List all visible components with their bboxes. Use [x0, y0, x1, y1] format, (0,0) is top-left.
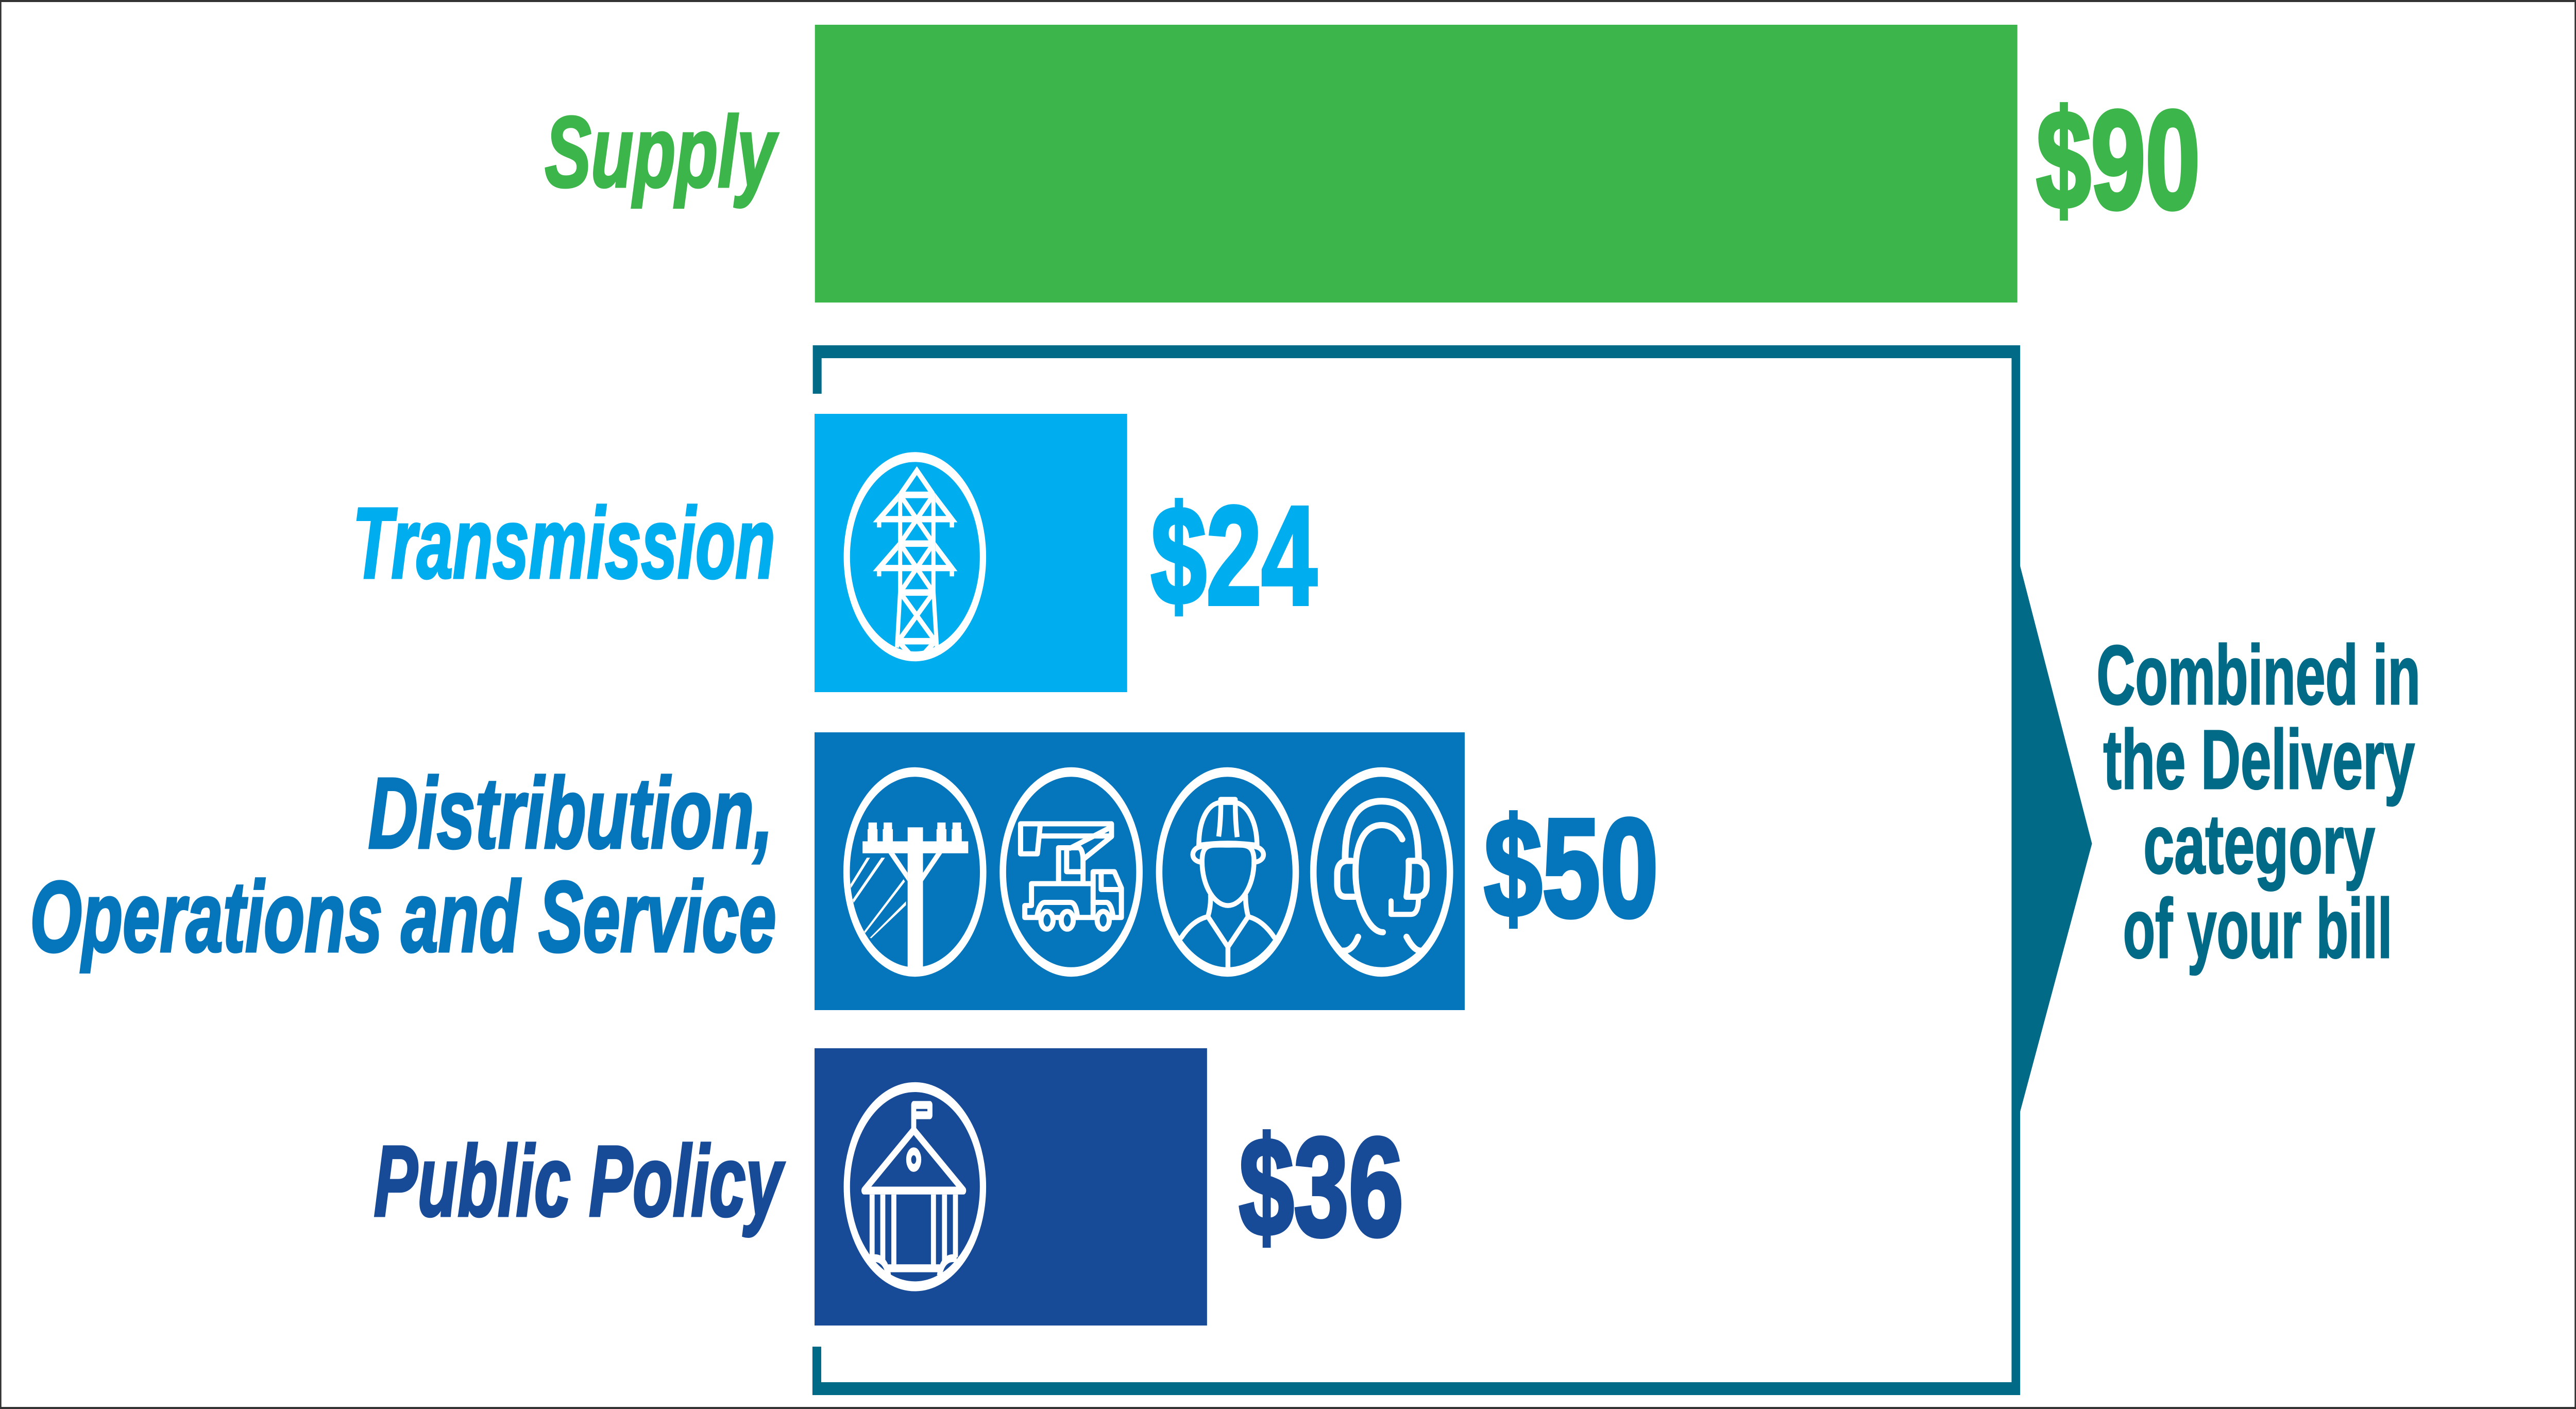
- label: Transmission: Transmission: [353, 488, 775, 599]
- callout: combined in the delivery category: of your bill: [2123, 882, 2392, 976]
- arrow: delivery bracket pointer: [2019, 561, 2092, 1117]
- label: Distribution, Operations and Service: Distribution,: [368, 758, 773, 869]
- bar: Public Policy: [815, 1048, 1207, 1326]
- label: Distribution, Operations and Service: Operations and Service: [30, 861, 776, 973]
- value: Transmission: $24: [1151, 478, 1317, 634]
- value: Supply: $90: [2037, 82, 2200, 238]
- callout: combined in the delivery category: the Delivery: [2103, 713, 2415, 807]
- label: Distribution, Operations and Service: [30, 758, 776, 973]
- icon: transmission tower: [847, 457, 983, 657]
- icon: lineworker in hard hat: [1159, 772, 1296, 972]
- bar: Supply: [815, 25, 2018, 303]
- icon: customer service headset: [1313, 772, 1450, 972]
- icon: bucket truck: [1003, 772, 1140, 972]
- callout: combined in the delivery category: Combined in: [2096, 628, 2420, 722]
- bar: Transmission: [815, 414, 1127, 692]
- label: Supply: Supply: [545, 96, 778, 208]
- delivery bracket: [812, 345, 2020, 1395]
- value: Public Policy: $36: [1239, 1109, 1403, 1265]
- callout: combined in the delivery category: [2096, 628, 2420, 976]
- icon: utility pole: [846, 772, 983, 972]
- icon: public building with flag: [847, 1087, 983, 1286]
- value: Distribution, Operations and Service: $50: [1484, 790, 1658, 946]
- callout: combined in the delivery category: category: [2143, 797, 2375, 891]
- label: Public Policy: Public Policy: [374, 1126, 785, 1237]
- bar: Distribution, Operations and Service: [815, 732, 1465, 1010]
